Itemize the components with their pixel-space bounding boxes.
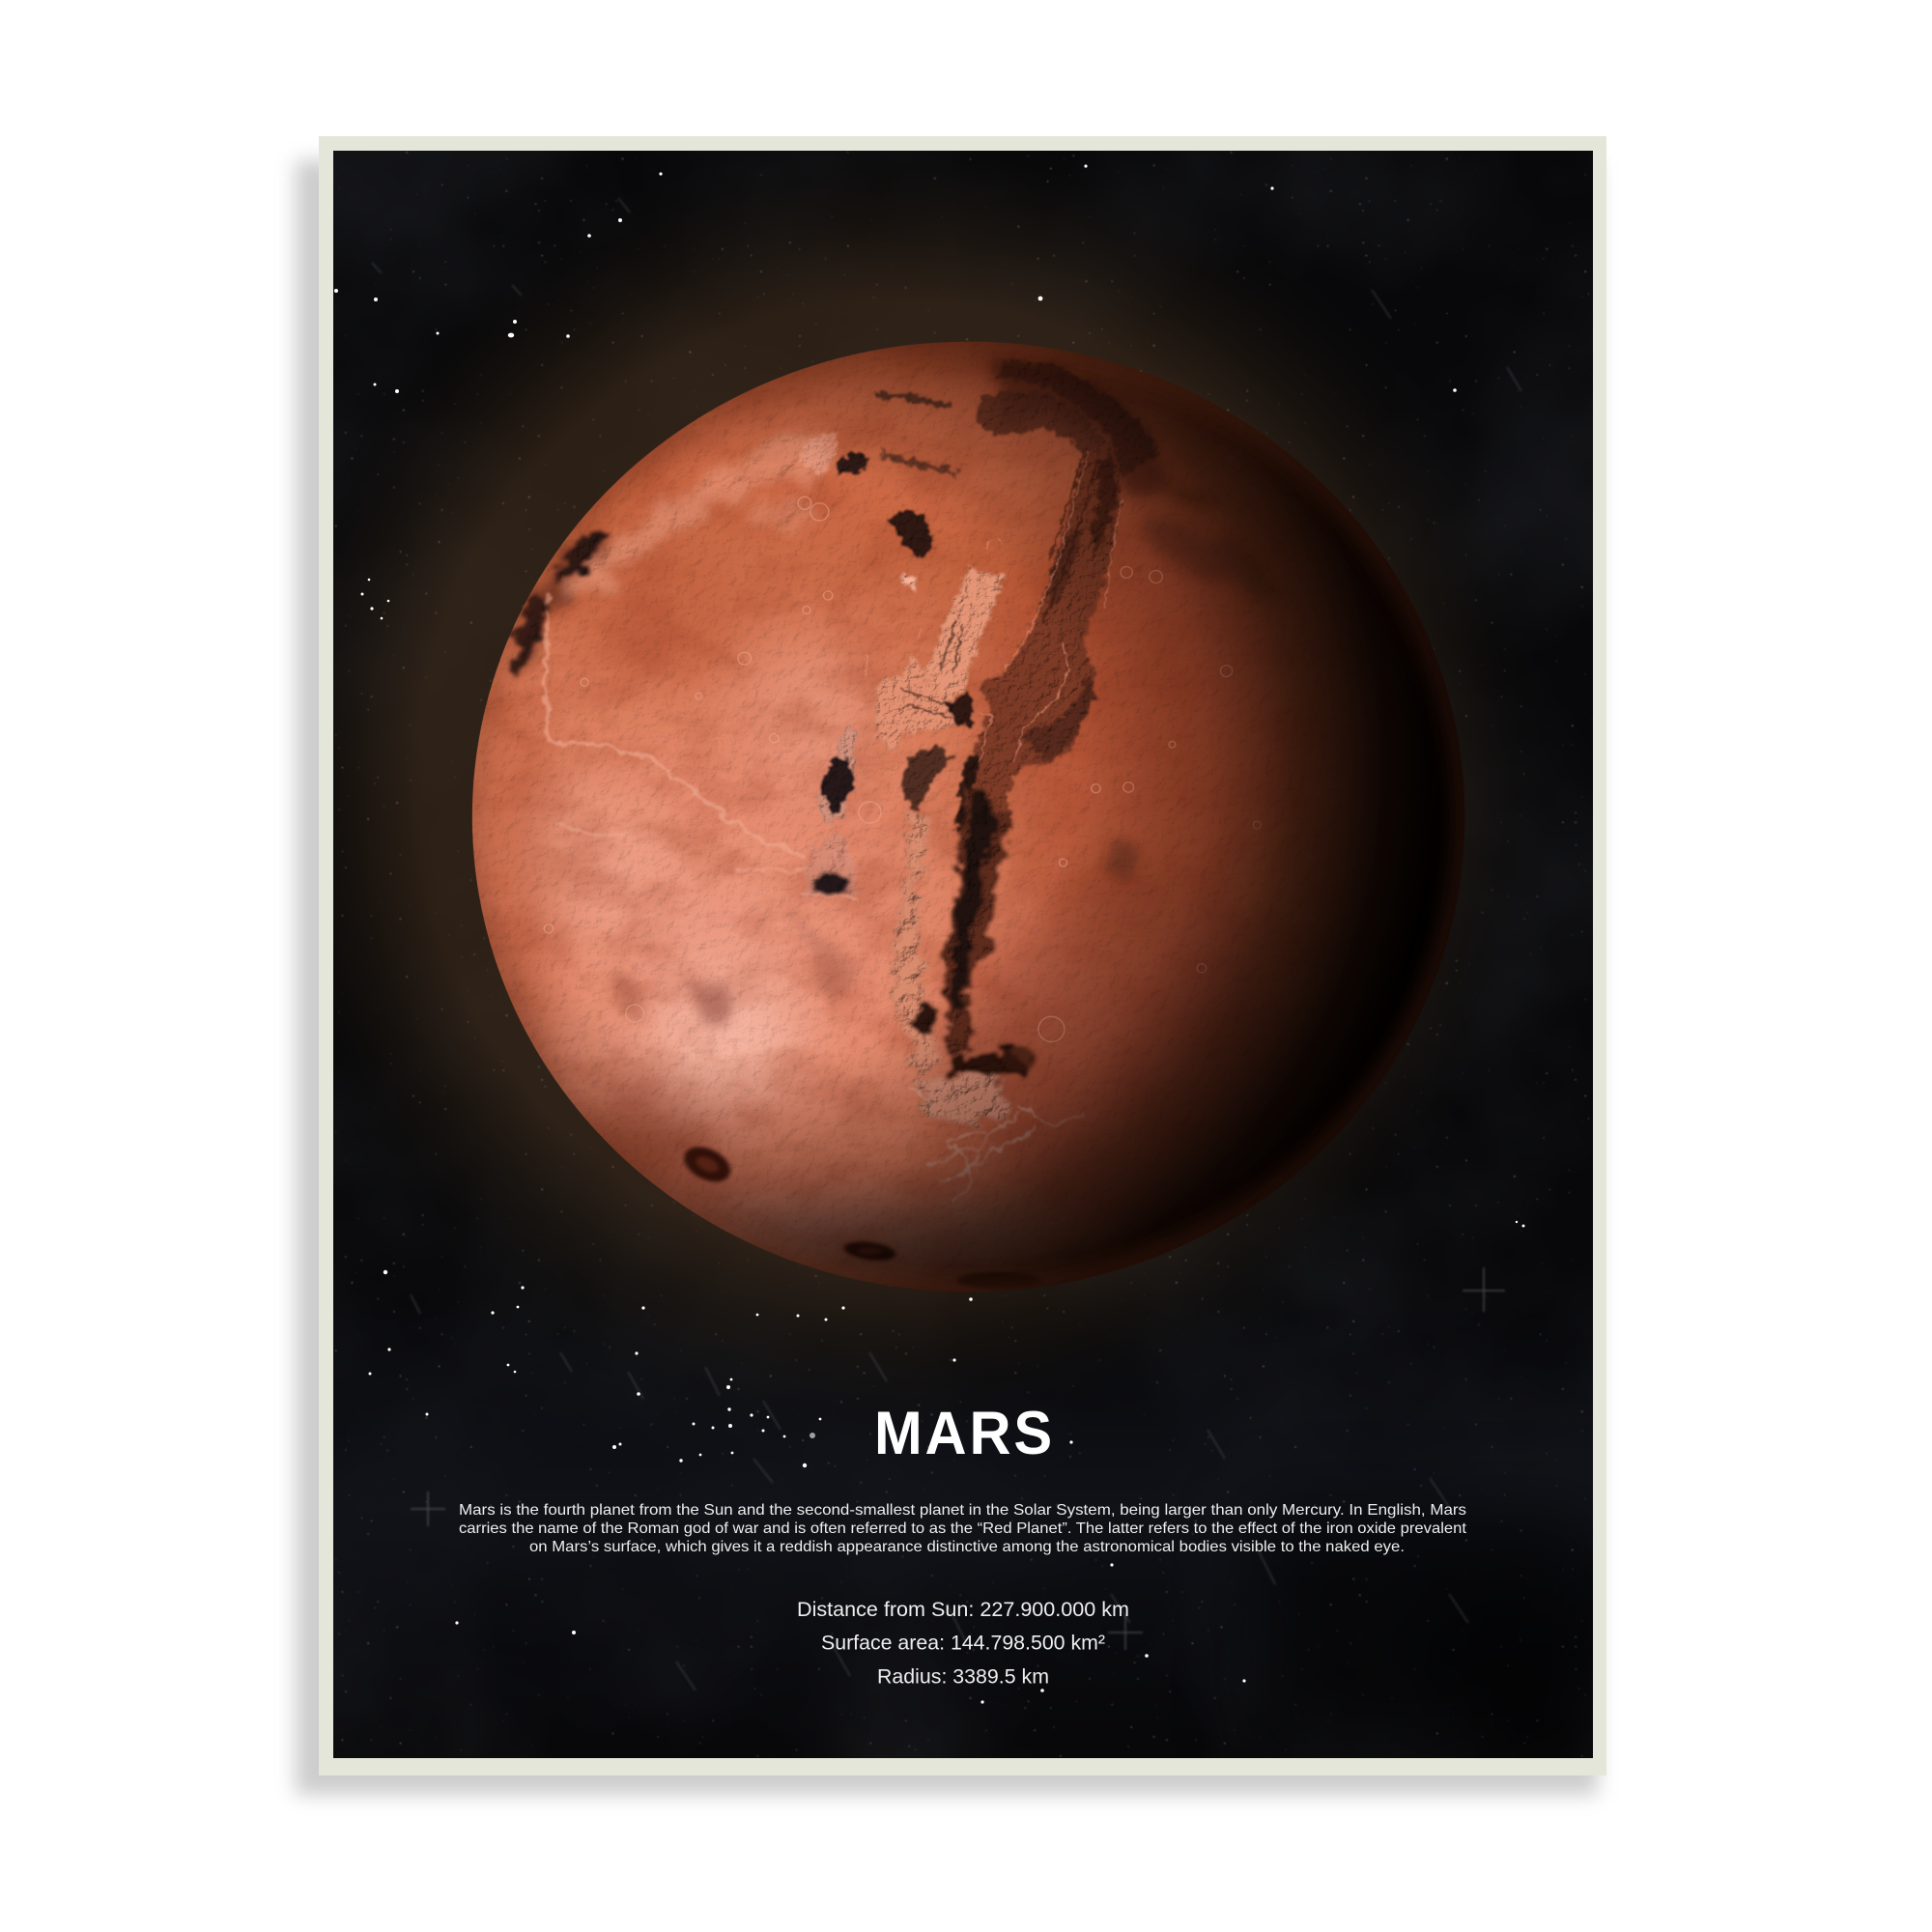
- description paragraph: on Mars’s surface, which gives it a reddish appearance distinctive among the astronomical bodies visible to the naked eye.: [529, 1539, 1405, 1555]
- planet statistics: Surface area: 144.798.500 km²: [821, 1633, 1105, 1654]
- dark core: [513, 529, 1032, 1079]
- description paragraph: carries the name of the Roman god of war and is often referred to as the “Red Planet”. The latter refers to the effect of the iron oxide prevalent: [459, 1520, 1467, 1537]
- canyon bands: [804, 787, 1012, 1125]
- limb darkening: [472, 342, 1464, 1292]
- shield volcano calderas: [678, 1046, 1041, 1289]
- canyon dark cores: [821, 452, 1118, 831]
- broad albedo tints: [477, 373, 1287, 1264]
- planet Mars: [464, 328, 1488, 1314]
- title: MARS: [874, 1400, 1055, 1467]
- canyon wall streaks: [901, 457, 1098, 718]
- dark albedo regions: [513, 360, 1287, 1026]
- canyon rim highlights: [865, 451, 1122, 763]
- description paragraph: [459, 1502, 1467, 1555]
- canyon floor bands: [802, 360, 1159, 831]
- planet statistics: Radius: 3389.5 km: [877, 1665, 1049, 1689]
- planet statistics: [797, 1599, 1129, 1689]
- star field: [333, 151, 1593, 1758]
- wall shadow: [296, 160, 1598, 1795]
- surface mottling: [473, 395, 1035, 1198]
- northern canyon system: [802, 360, 1159, 831]
- description paragraph: Mars is the fourth planet from the Sun and the second-smallest planet in the Solar System, being larger than only Mercury. In English, Mars: [459, 1502, 1466, 1519]
- terminator shadow: [466, 333, 1471, 1300]
- poster frame: [319, 136, 1606, 1776]
- pale highlands northwest: [561, 432, 836, 599]
- planet statistics: Distance from Sun: 227.900.000 km: [797, 1599, 1129, 1621]
- outflow channel network: [908, 1089, 1084, 1202]
- small craters: [544, 497, 1261, 1041]
- pale ridges: [546, 592, 856, 897]
- southern canyon system: [513, 529, 1032, 1125]
- poster background: [333, 151, 1593, 1758]
